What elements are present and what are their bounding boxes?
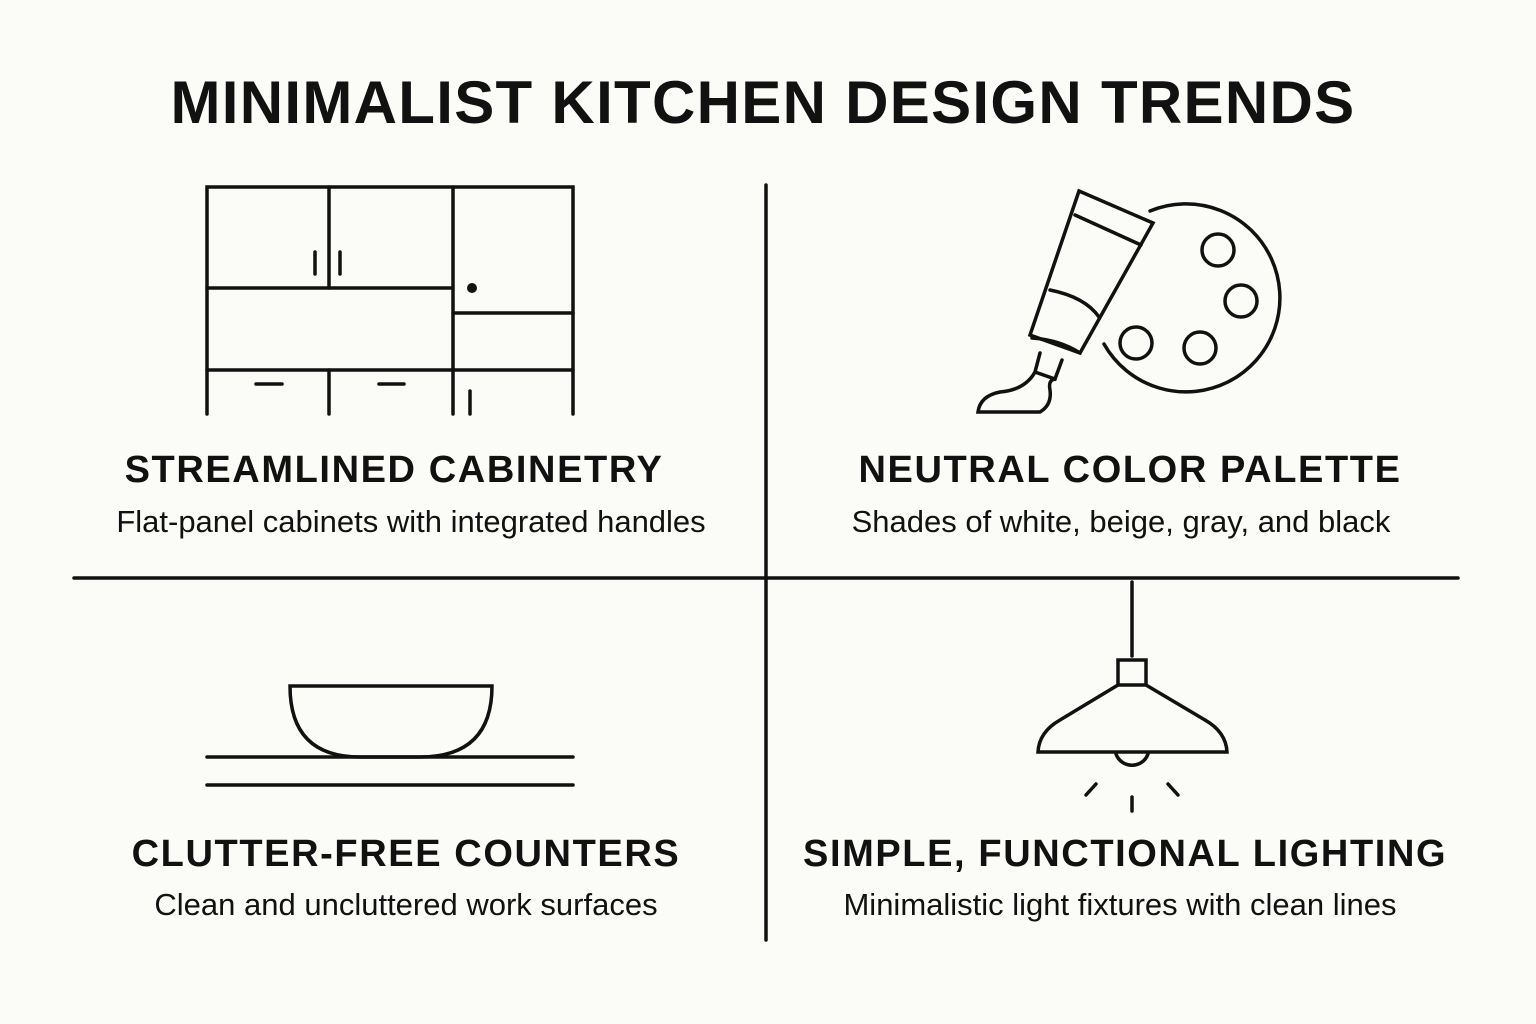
icon: cabinetry: [207, 187, 573, 414]
title: MINIMALIST KITCHEN DESIGN TRENDS: [171, 69, 1355, 136]
icon: bowl on counter: [207, 686, 573, 785]
heading: lighting: SIMPLE, FUNCTIONAL LIGHTING: [803, 833, 1447, 875]
heading: streamlined cabinetry: STREAMLINED CABINETRY: [125, 449, 663, 491]
icon: paint tube and palette: [978, 191, 1280, 412]
heading: clutter-free counters: CLUTTER-FREE COUNTERS: [132, 833, 680, 875]
icon: pendant lamp: [1038, 582, 1227, 811]
text: cabinetry desc: Flat-panel cabinets with integrated handles: [116, 504, 706, 539]
text: palette desc: Shades of white, beige, gray, and black: [852, 504, 1390, 539]
heading: neutral color palette: NEUTRAL COLOR PALETTE: [858, 449, 1402, 491]
text: lighting desc: Minimalistic light fixtures with clean lines: [843, 887, 1397, 922]
text: counters desc: Clean and uncluttered work surfaces: [154, 887, 658, 922]
